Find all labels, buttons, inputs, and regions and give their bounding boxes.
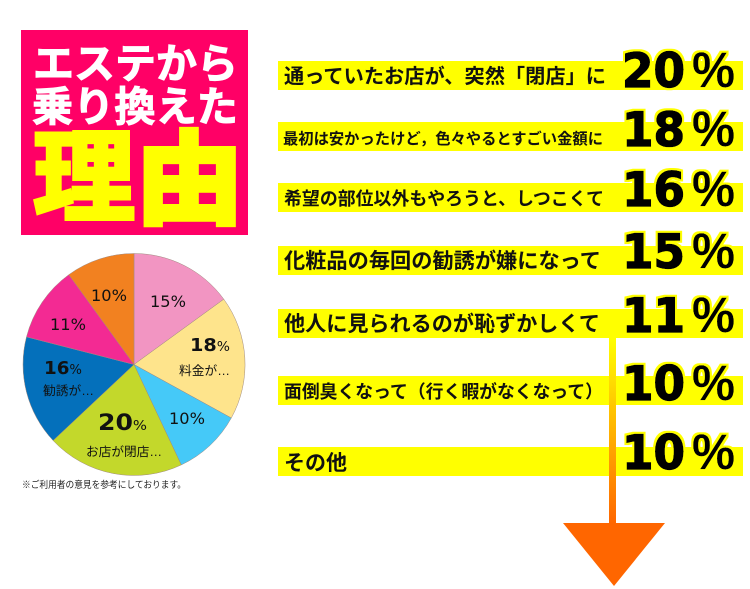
- row 2: [278, 101, 743, 158]
- row 7: その他: [284, 452, 347, 475]
- row 1: 通っていたお店が、突然「閉店」に: [284, 64, 606, 88]
- row 5: 他人に見られるのが恥ずかしくて: [284, 312, 600, 336]
- label: 15%: 15%: [150, 292, 186, 311]
- row 5: 11: [622, 289, 685, 344]
- row 2: 18: [622, 103, 685, 158]
- slice: 15%: [134, 253, 224, 364]
- title panel: [21, 30, 248, 237]
- row 2: %: [692, 101, 735, 157]
- row 3: %: [692, 161, 735, 217]
- label: 料金が: 料金が…: [179, 363, 230, 378]
- label: 10% blue: 10%: [169, 409, 205, 428]
- label: 18%: 18%: [190, 335, 230, 356]
- title line: 乗り換えた: 乗り換えた: [32, 84, 238, 130]
- row 1: [278, 42, 743, 99]
- slice: 20%: [53, 364, 181, 475]
- row 2: 最初は安かったけど，色々やるとすごい金額に: [283, 129, 603, 148]
- row 7: [278, 424, 743, 481]
- slice: 16%: [23, 337, 134, 440]
- row 1: %: [692, 42, 735, 98]
- pie chart: [23, 253, 245, 475]
- row 4: 15: [622, 225, 685, 280]
- slice: 11%: [26, 275, 134, 364]
- row 3: 16: [622, 163, 685, 218]
- row 3: [278, 161, 743, 218]
- label: 11%: 11%: [50, 315, 86, 334]
- footnote: ※ご利用者の意見を参考にしております。: [22, 479, 186, 491]
- row 5: %: [692, 287, 735, 343]
- row 7: 10: [622, 426, 685, 481]
- row 4: [278, 223, 743, 280]
- row 4: 化粧品の毎回の勧誘が嫌になって: [284, 249, 601, 273]
- row 4: %: [692, 223, 735, 279]
- title word: 理由: [33, 123, 243, 237]
- row 1: 20: [622, 44, 685, 99]
- row 6: 面倒臭くなって（行く暇がなくなって）: [284, 381, 603, 402]
- label: 16%: 16%: [44, 358, 82, 379]
- title line: エステから: エステから: [33, 41, 238, 87]
- label: お店が閉店: お店が閉店…: [86, 444, 162, 459]
- label: 20%: 20 %: [98, 411, 147, 436]
- row 6: 10: [622, 357, 685, 412]
- row 3: 希望の部位以外もやろうと、しつこくて: [284, 189, 604, 209]
- row 6: %: [692, 355, 735, 411]
- label: 勧誘が: 勧誘が…: [43, 383, 94, 398]
- arrow: [563, 338, 665, 586]
- row 6: [278, 355, 743, 412]
- slice: 10% blue: [134, 364, 231, 465]
- slice: 10% orange: [69, 254, 134, 364]
- label: 10% orange: 10%: [91, 286, 127, 305]
- row 5: [278, 287, 743, 344]
- row 7: %: [692, 424, 735, 480]
- title word: 理由: 由: [136, 125, 243, 237]
- title word: 理由: 理: [33, 123, 135, 235]
- slice: 18%: [134, 299, 245, 418]
